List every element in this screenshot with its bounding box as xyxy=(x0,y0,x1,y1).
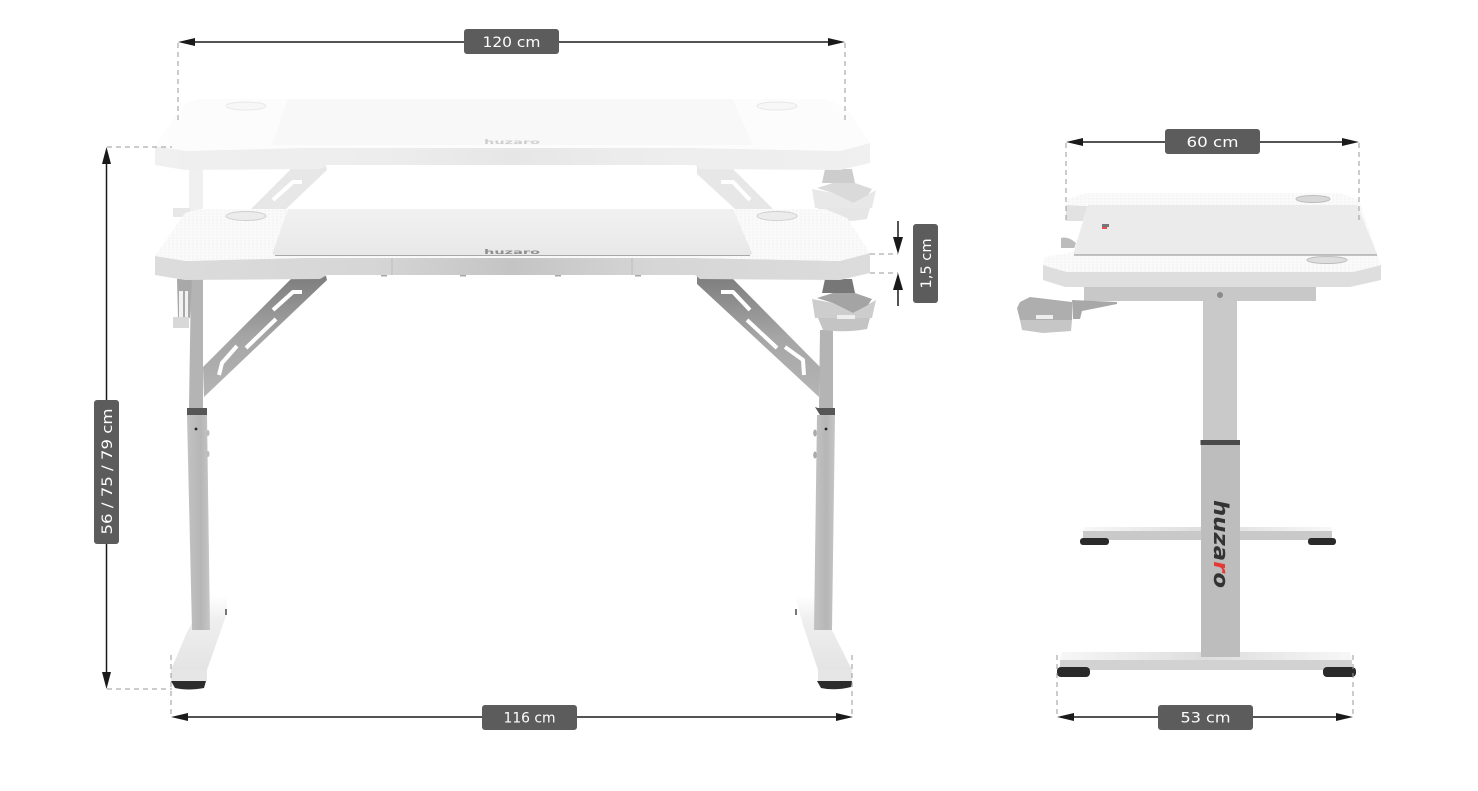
badge xyxy=(464,29,559,54)
arrowheads xyxy=(1057,713,1353,721)
mouse pad xyxy=(273,209,752,255)
foot pad xyxy=(817,681,852,689)
cup clip xyxy=(1036,315,1053,319)
side mouse pad xyxy=(1074,205,1377,255)
badge xyxy=(1158,705,1253,730)
front edge xyxy=(155,253,870,280)
front pad right xyxy=(1323,667,1356,677)
brace slots xyxy=(721,292,804,375)
grommet back xyxy=(1296,196,1330,202)
side view desk xyxy=(1017,193,1381,677)
ghost desktop surface xyxy=(155,99,870,151)
ghost right brace slot xyxy=(721,182,750,200)
cup holder xyxy=(812,279,876,331)
adjustment hole xyxy=(195,428,197,430)
front pad left xyxy=(1057,667,1090,677)
arrowheads xyxy=(102,147,111,689)
ghost right brace xyxy=(697,166,773,209)
foot front face xyxy=(171,670,207,681)
cup clip xyxy=(837,315,855,319)
lower desktop xyxy=(155,209,870,280)
cup base xyxy=(818,318,870,331)
arrowheads xyxy=(171,713,853,721)
foot base xyxy=(795,595,852,670)
label: 53 cm xyxy=(1180,710,1230,726)
label: 60 cm xyxy=(1186,135,1238,151)
hook slots xyxy=(179,291,188,317)
label: 1,5 cm xyxy=(919,239,935,288)
dimension: desk width 120 cm xyxy=(178,29,845,122)
cup base xyxy=(1020,320,1072,333)
cup rim xyxy=(1017,297,1072,320)
rear foot xyxy=(1080,527,1336,545)
guide lines xyxy=(107,147,172,689)
dimension: side foot 53 cm xyxy=(1057,655,1353,730)
pad border xyxy=(1074,254,1377,256)
adjustment hole xyxy=(825,428,827,430)
ghost left brace slot xyxy=(273,182,302,200)
dimension: height 56 / 75 / 79 cm xyxy=(94,147,172,689)
desktop surface xyxy=(1043,193,1381,272)
arrow line xyxy=(183,716,841,718)
arrowheads xyxy=(1066,138,1359,146)
pad front line xyxy=(275,254,750,256)
frame bolt xyxy=(1217,292,1223,298)
ghost grommet left xyxy=(226,102,266,110)
adjustment knob top xyxy=(206,430,210,436)
pad logo mark xyxy=(1102,224,1109,227)
badge xyxy=(913,224,938,303)
textured surface xyxy=(155,209,870,261)
front foot xyxy=(1057,652,1356,677)
guide lines xyxy=(870,254,898,273)
guide lines xyxy=(1066,143,1359,222)
desk frame xyxy=(1084,287,1316,301)
left brace xyxy=(203,276,327,397)
arrowheads xyxy=(178,38,845,46)
adjustment knob bottom xyxy=(813,452,817,458)
foot front face xyxy=(818,670,852,681)
under-desk screws xyxy=(381,275,641,276)
front foot face xyxy=(1060,660,1352,670)
ghost cup holder xyxy=(812,169,876,221)
guide lines xyxy=(178,43,845,122)
arrow line xyxy=(1069,716,1341,718)
rear pad left xyxy=(1080,538,1109,545)
grommet front xyxy=(1307,256,1347,264)
cup arm xyxy=(1072,300,1117,319)
pad logo: huzaro xyxy=(484,249,540,256)
arrow lines xyxy=(897,221,899,306)
column sleeve xyxy=(1201,445,1240,657)
badge xyxy=(1165,129,1260,154)
pad logo accent xyxy=(1102,227,1107,229)
ghost left brace xyxy=(251,166,327,209)
raised desk (ghost, highest position) xyxy=(155,143,876,221)
brace plate xyxy=(203,276,327,397)
grommet right xyxy=(757,212,797,220)
desktop edge xyxy=(1043,265,1381,287)
badge xyxy=(482,705,577,730)
lower sleeve xyxy=(187,415,210,630)
dimension: thickness 1,5 cm xyxy=(870,221,938,306)
back bracket xyxy=(1066,205,1089,221)
lower column xyxy=(1203,301,1237,440)
rear pad right xyxy=(1308,538,1336,545)
ghost desktop front edge xyxy=(155,143,870,170)
label: 120 cm xyxy=(482,35,540,51)
arrowheads xyxy=(893,237,903,290)
brace slots xyxy=(219,292,302,375)
sleeve cap xyxy=(815,407,835,415)
headphone hook xyxy=(173,279,192,328)
grommet left xyxy=(226,212,266,220)
hook arm xyxy=(177,279,192,318)
rear pad xyxy=(225,609,227,615)
guide lines xyxy=(1057,655,1353,716)
rear foot top xyxy=(1083,527,1332,531)
arrow line xyxy=(106,159,108,677)
brand logo: huza r o xyxy=(1209,500,1233,588)
ghost left leg xyxy=(189,165,203,215)
adjustment knob bottom xyxy=(206,451,210,457)
seam right xyxy=(631,258,633,275)
hook foot xyxy=(173,317,189,328)
arrow line xyxy=(190,41,833,43)
mount xyxy=(822,279,855,293)
seam left xyxy=(391,258,393,275)
rear foot face xyxy=(1083,531,1332,540)
sleeve cap xyxy=(187,408,207,415)
upper column xyxy=(819,330,833,408)
lower sleeve xyxy=(814,415,835,630)
foot base xyxy=(171,595,227,670)
cup body xyxy=(812,299,876,318)
front view right leg xyxy=(795,330,852,689)
front view left leg xyxy=(171,279,227,690)
guide lines xyxy=(171,655,852,716)
foot pad xyxy=(171,681,206,690)
back hook xyxy=(1061,238,1076,248)
cup inner xyxy=(817,293,872,313)
front foot top xyxy=(1060,652,1352,660)
ghost mouse pad xyxy=(273,99,752,145)
ghost headphone hook xyxy=(173,169,190,217)
upper column xyxy=(189,279,203,408)
label: 56 / 75 / 79 cm xyxy=(100,408,116,534)
right brace xyxy=(697,276,820,397)
dimension: foot width 116 cm xyxy=(171,655,853,730)
ghost grommet right xyxy=(757,102,797,110)
ghost pad logo: huzaro xyxy=(484,139,540,146)
brace plate xyxy=(697,276,820,397)
badge xyxy=(94,400,119,544)
adjustment knob top xyxy=(813,430,817,436)
column cap xyxy=(1200,440,1240,445)
dimension: desk depth 60 cm xyxy=(1066,129,1359,222)
label: 116 cm xyxy=(504,710,556,726)
rear pad xyxy=(795,609,797,615)
arrow line xyxy=(1078,141,1347,143)
